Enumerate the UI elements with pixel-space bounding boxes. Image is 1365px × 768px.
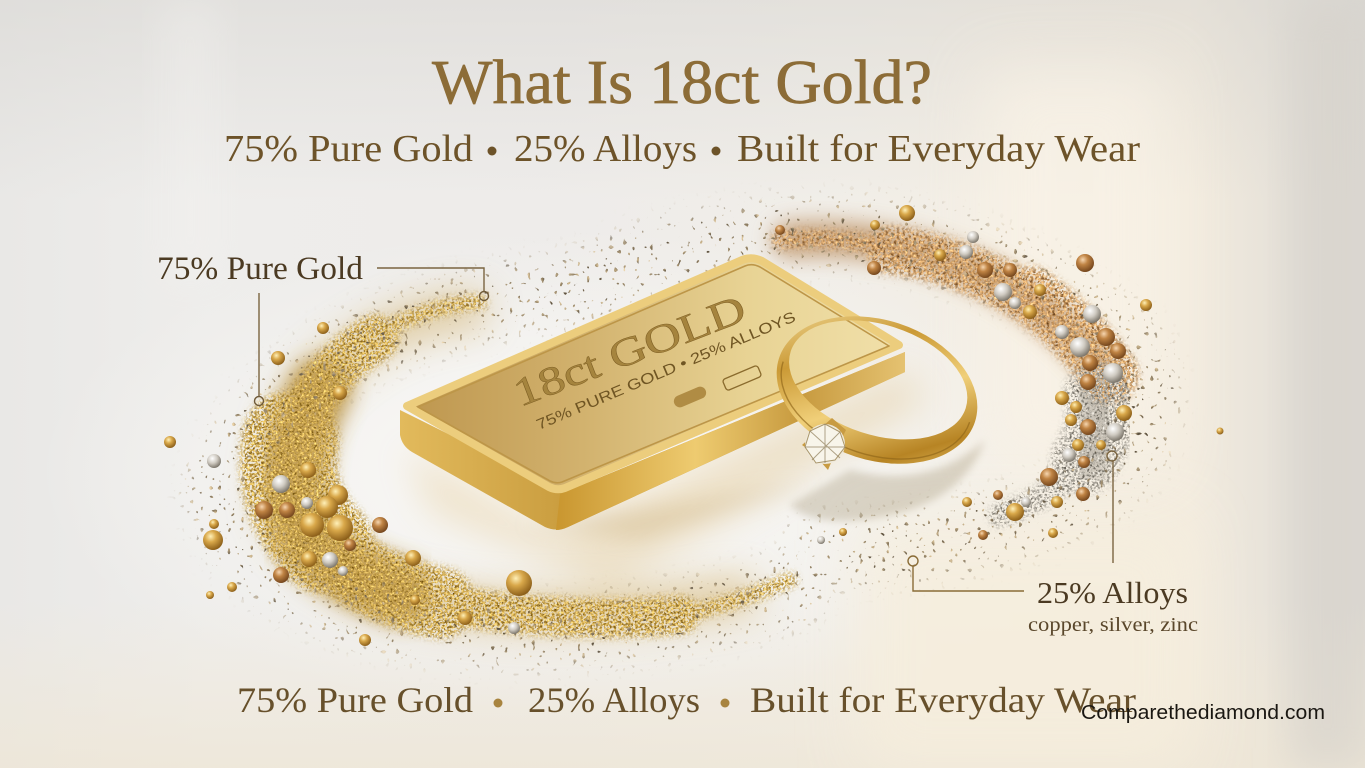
bar engraved subtext: 75% PURE GOLD • 25% ALLOYS (534, 309, 798, 434)
gold ring with diamond (757, 292, 997, 521)
bar inner bevel (418, 265, 889, 483)
bar side faces (400, 352, 905, 530)
callout: 75% pure gold: 75% Pure Gold (157, 251, 364, 287)
ring shadow (790, 440, 985, 521)
alloy particle swirl: copper and silver right arc (760, 207, 1144, 530)
subtitle (224, 128, 1140, 170)
bar top face (407, 258, 899, 489)
scattered fine particles (170, 184, 1188, 680)
callout: 25% alloys (908, 451, 1198, 636)
gold particle swirl: left arc (233, 273, 803, 651)
subtitle: 25% Alloys (514, 128, 697, 170)
gold bar (400, 258, 905, 530)
watermark: Comparethediamond.com (1081, 702, 1325, 724)
ring band (757, 292, 997, 488)
bottom tagline: Built for Everyday Wear (750, 680, 1136, 720)
title: What Is 18ct Gold? (432, 49, 932, 117)
subtitle: Built for Everyday Wear (737, 128, 1140, 170)
bottom tagline: 25% Alloys (528, 680, 700, 720)
callout: 25% alloys: copper, silver, zinc (1028, 614, 1198, 636)
bar reflection on floor (405, 372, 925, 590)
bar engraved heading: 18ct GOLD (507, 286, 752, 415)
metal spheres: right cluster (775, 205, 1224, 544)
metal spheres: left cluster (164, 322, 532, 646)
subtitle: 75% Pure Gold (224, 128, 473, 170)
ring band highlight (764, 362, 970, 482)
hallmark stamps (672, 365, 762, 409)
bottom tagline: 75% Pure Gold (237, 680, 473, 720)
diamond (802, 418, 846, 470)
callout: 25% alloys: 25% Alloys (1037, 575, 1188, 610)
callout: 75% pure gold (157, 251, 488, 406)
bottom tagline (237, 680, 1136, 720)
